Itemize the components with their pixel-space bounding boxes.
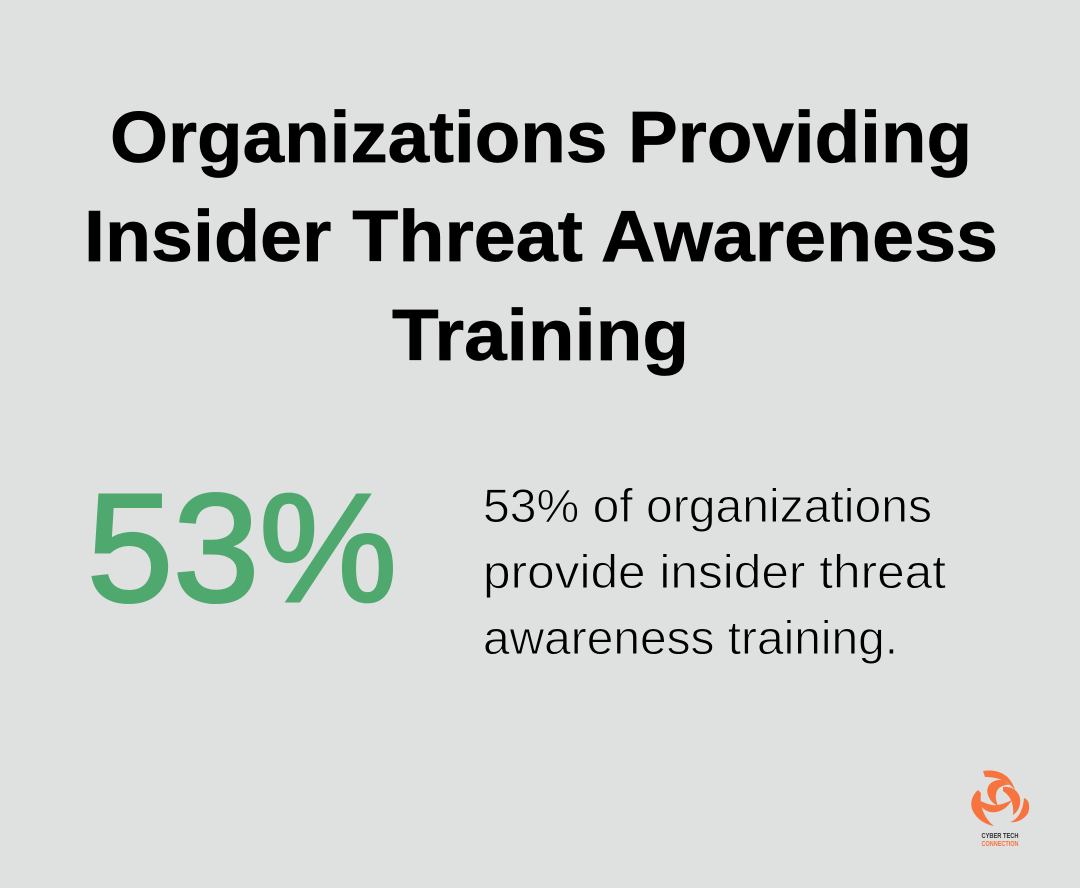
title: Insider Threat Awareness	[84, 197, 998, 277]
title: Training	[392, 296, 689, 376]
title	[84, 98, 998, 376]
logo: Cyber Tech Connection	[971, 771, 1029, 848]
logo wordmark	[982, 833, 1018, 848]
description text: provide insider threat	[483, 545, 946, 598]
logo wordmark: CYBER TECH	[982, 833, 1018, 840]
description text: awareness training.	[483, 611, 898, 664]
big statistic: 53%: 53%	[87, 462, 397, 634]
title: Organizations Providing	[110, 98, 972, 178]
description text	[483, 479, 946, 664]
icon: three swirling orange arcs	[971, 771, 1029, 826]
logo wordmark: CONNECTION	[982, 841, 1018, 848]
description text: 53% of organizations	[483, 479, 932, 532]
